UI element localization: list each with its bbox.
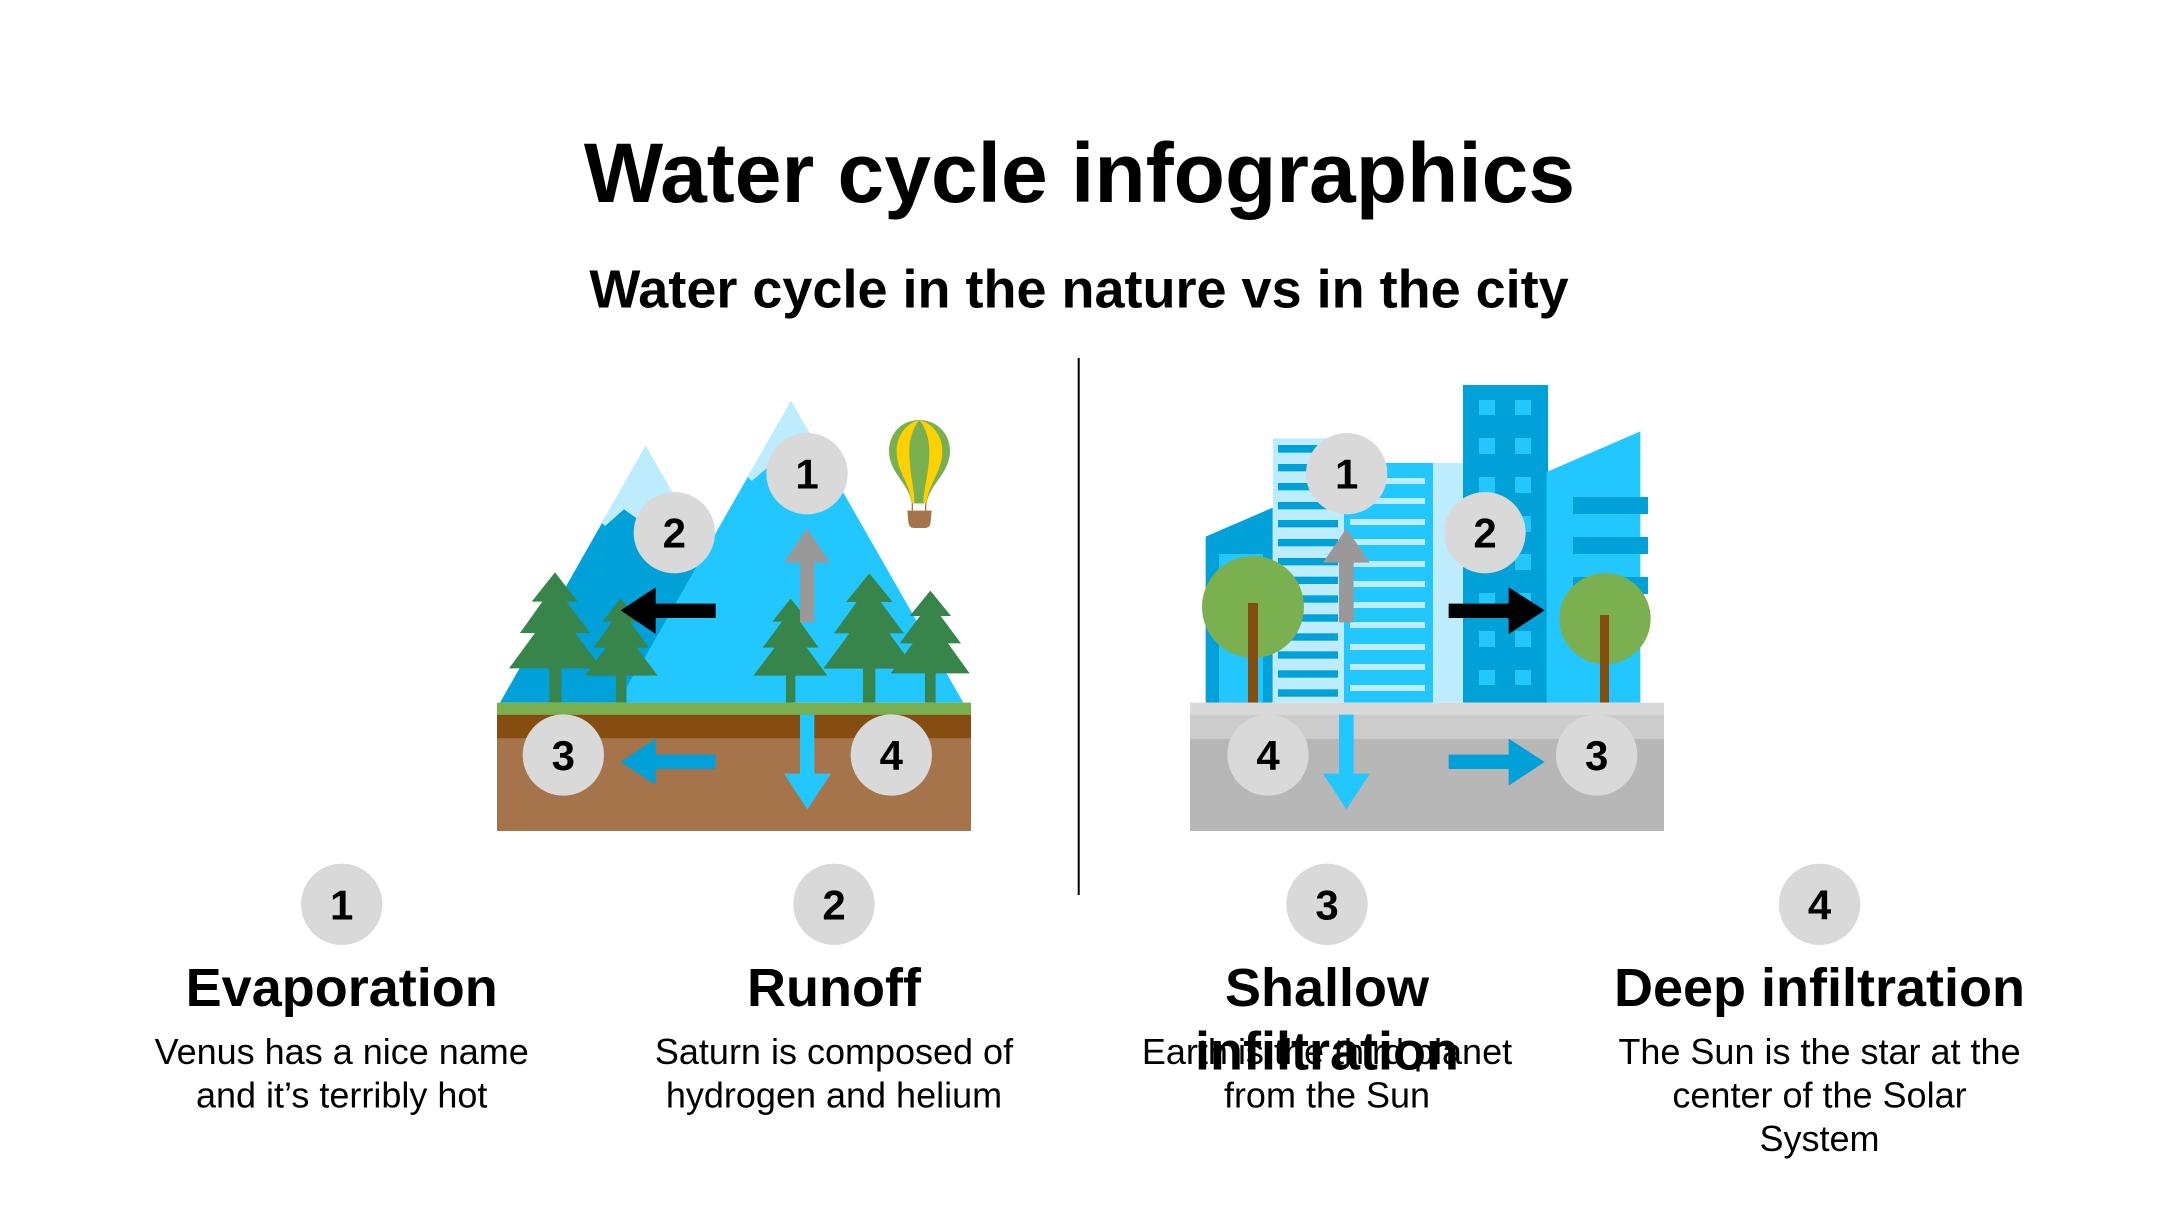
description: evaporation: Venus has a nice name	[155, 1031, 529, 1072]
badge 1: 1	[1335, 451, 1358, 498]
arrow: evaporation up	[1323, 528, 1370, 622]
heading: deep infiltration: Deep infiltration	[1614, 958, 2025, 1018]
building: striped light tower	[1273, 438, 1344, 703]
badge 2	[634, 492, 715, 573]
heading: runoff: Runoff	[747, 958, 922, 1018]
description: runoff	[655, 1031, 1014, 1116]
badge 2: 2	[1473, 510, 1497, 557]
badge 1	[1306, 433, 1387, 514]
number badge 1: 1	[330, 882, 353, 928]
icon: hot air balloon	[889, 420, 950, 528]
arrow: deep infiltration down	[784, 715, 831, 809]
arrow: shallow infiltration right	[1449, 739, 1545, 786]
pavement layers	[1190, 703, 1664, 831]
arrow: shallow infiltration left	[621, 739, 716, 785]
description: deep infiltration: center of the Solar	[1672, 1074, 1967, 1116]
description: deep infiltration: The Sun is the star at the	[1618, 1031, 2021, 1072]
description: runoff: hydrogen and helium	[666, 1074, 1002, 1116]
description: shallow infiltration	[1142, 1031, 1512, 1116]
badge 1	[766, 433, 848, 514]
panel: city illustration	[1190, 385, 1664, 831]
panel: nature illustration	[497, 401, 971, 831]
number badge 3	[1286, 864, 1368, 945]
pine trees	[509, 572, 970, 703]
large mountain	[627, 401, 963, 703]
ground layers	[497, 703, 971, 831]
building: striped blue block	[1344, 463, 1433, 703]
subtitle: Water cycle in the nature vs in the city	[589, 260, 1569, 320]
badge 1: 1	[795, 451, 819, 498]
badge 3: 3	[1585, 732, 1608, 779]
number badge 4	[1779, 864, 1860, 945]
tree: left	[1202, 556, 1304, 703]
arrow: runoff right	[1449, 587, 1545, 634]
number badge 4: 4	[1808, 882, 1832, 928]
column 3: shallow infiltration	[1142, 864, 1512, 1116]
description: evaporation: and it’s terribly hot	[196, 1074, 487, 1116]
description: deep infiltration: System	[1759, 1118, 1880, 1159]
column 2: runoff	[655, 864, 1014, 1116]
description: shallow infiltration: from the Sun	[1224, 1074, 1430, 1116]
heading: evaporation: Evaporation	[186, 958, 498, 1018]
building: pale connector	[1433, 463, 1463, 703]
description: evaporation	[155, 1031, 529, 1116]
building: tall tower	[1463, 385, 1548, 703]
center divider line	[1078, 358, 1080, 895]
column 4: deep infiltration	[1614, 864, 2025, 1159]
heading: shallow infiltration: Shallow	[1225, 958, 1430, 1018]
column 1: evaporation	[155, 864, 529, 1116]
number badge 1	[301, 864, 382, 945]
badge 4: 4	[880, 732, 904, 779]
number badge 2: 2	[822, 882, 846, 928]
number badge 3: 3	[1315, 882, 1339, 928]
description: runoff: Saturn is composed of	[655, 1031, 1014, 1072]
badge 3: 3	[552, 732, 575, 779]
building: left low	[1206, 508, 1273, 703]
badge 4: 4	[1256, 732, 1280, 779]
badge 4	[1227, 714, 1309, 796]
description: shallow infiltration: Earth is the third planet	[1142, 1031, 1512, 1072]
arrow: runoff left	[621, 587, 716, 634]
heading: shallow infiltration	[1195, 958, 1459, 1082]
arrow: deep infiltration down	[1323, 715, 1370, 809]
dark mountain	[500, 446, 792, 703]
description: deep infiltration	[1618, 1031, 2021, 1159]
number badge 2	[793, 864, 875, 945]
badge 2	[1444, 492, 1526, 573]
title: Water cycle infographics	[584, 126, 1575, 220]
heading: shallow infiltration: infiltration	[1195, 1022, 1459, 1082]
arrow: evaporation up	[784, 528, 830, 622]
badge 4	[851, 714, 932, 796]
building: right slanted	[1547, 431, 1648, 703]
badge 3	[523, 714, 604, 796]
badge 3	[1556, 714, 1637, 796]
badge 2: 2	[663, 510, 686, 557]
tree: right	[1559, 573, 1651, 703]
